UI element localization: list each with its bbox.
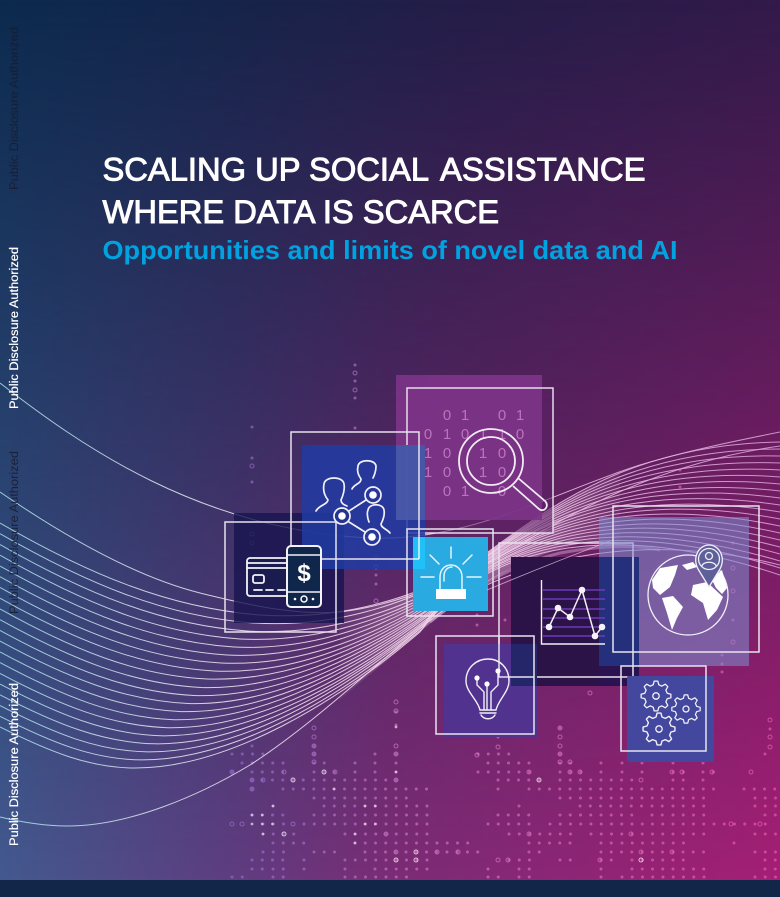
data dot field <box>230 365 776 877</box>
panel: line chart <box>487 540 639 686</box>
watermark: public disclosure stamps: Public Disclosure Authorized <box>9 247 21 409</box>
binary digits: 1 <box>443 426 451 443</box>
chart frame passing over the bulb panel <box>499 636 534 677</box>
binary digits: 1 <box>479 464 487 481</box>
dark backing square of the card panel <box>234 513 344 623</box>
binary digits: 1 <box>498 426 506 443</box>
panel: payment card and phone <box>225 522 336 632</box>
watermark: public disclosure stamps: Public Disclosure Authorized <box>9 683 21 846</box>
binary digits: 0 <box>424 426 432 443</box>
title <box>102 152 646 230</box>
binary digits: 1 <box>461 407 469 424</box>
flowing wave lines <box>0 383 780 826</box>
title: WHERE DATA IS SCARCE <box>102 194 499 230</box>
panel: magnifying glass over binary data <box>396 375 553 533</box>
panel: people network <box>291 432 425 569</box>
panel: gears <box>621 666 714 762</box>
icon: three gears <box>641 681 700 745</box>
watermark: public disclosure stamps: Public Disclosure Authorized <box>9 27 21 190</box>
binary digits: 1 <box>461 483 469 500</box>
icon: chart axes, grid and data line <box>542 580 605 644</box>
subtitle: Opportunities and limits of novel data and AI <box>102 235 678 265</box>
binary digits <box>424 407 524 500</box>
binary digits: 0 <box>443 407 451 424</box>
binary digits: 0 <box>498 464 506 481</box>
binary digits: 0 <box>443 464 451 481</box>
icon: phone with dollar sign: $ <box>297 560 311 587</box>
binary digits: 0 <box>498 407 506 424</box>
binary digits: 1 <box>516 407 524 424</box>
icon: connected people <box>316 461 390 545</box>
binary digits: 0 <box>461 426 469 443</box>
panel: light bulb <box>436 636 537 737</box>
watermark: public disclosure stamps <box>9 27 21 846</box>
panel: alert siren <box>407 529 493 616</box>
title: SCALING UP SOCIAL <box>102 152 429 188</box>
binary digits: 0 <box>498 483 506 500</box>
binary digits: 0 <box>498 445 506 462</box>
icon: location pin <box>696 545 722 587</box>
binary digits: 0 <box>443 483 451 500</box>
icon: globe <box>648 555 728 635</box>
icon: circuit bulb <box>466 659 509 719</box>
binary digits: 1 <box>479 426 487 443</box>
icon: bank card <box>247 558 291 596</box>
panel: globe with location pin <box>599 506 759 666</box>
watermark: public disclosure stamps: Public Disclosure Authorized <box>9 451 21 614</box>
footer band <box>0 880 780 897</box>
binary digits: 1 <box>424 445 432 462</box>
binary digits: 1 <box>424 464 432 481</box>
binary digits: 0 <box>443 445 451 462</box>
title: ASSISTANCE <box>440 152 646 188</box>
icon: magnifying glass <box>459 429 547 510</box>
magnifier outline box <box>407 388 553 533</box>
binary digits: 0 <box>516 426 524 443</box>
binary digits: 1 <box>479 445 487 462</box>
icon: siren <box>421 547 481 599</box>
